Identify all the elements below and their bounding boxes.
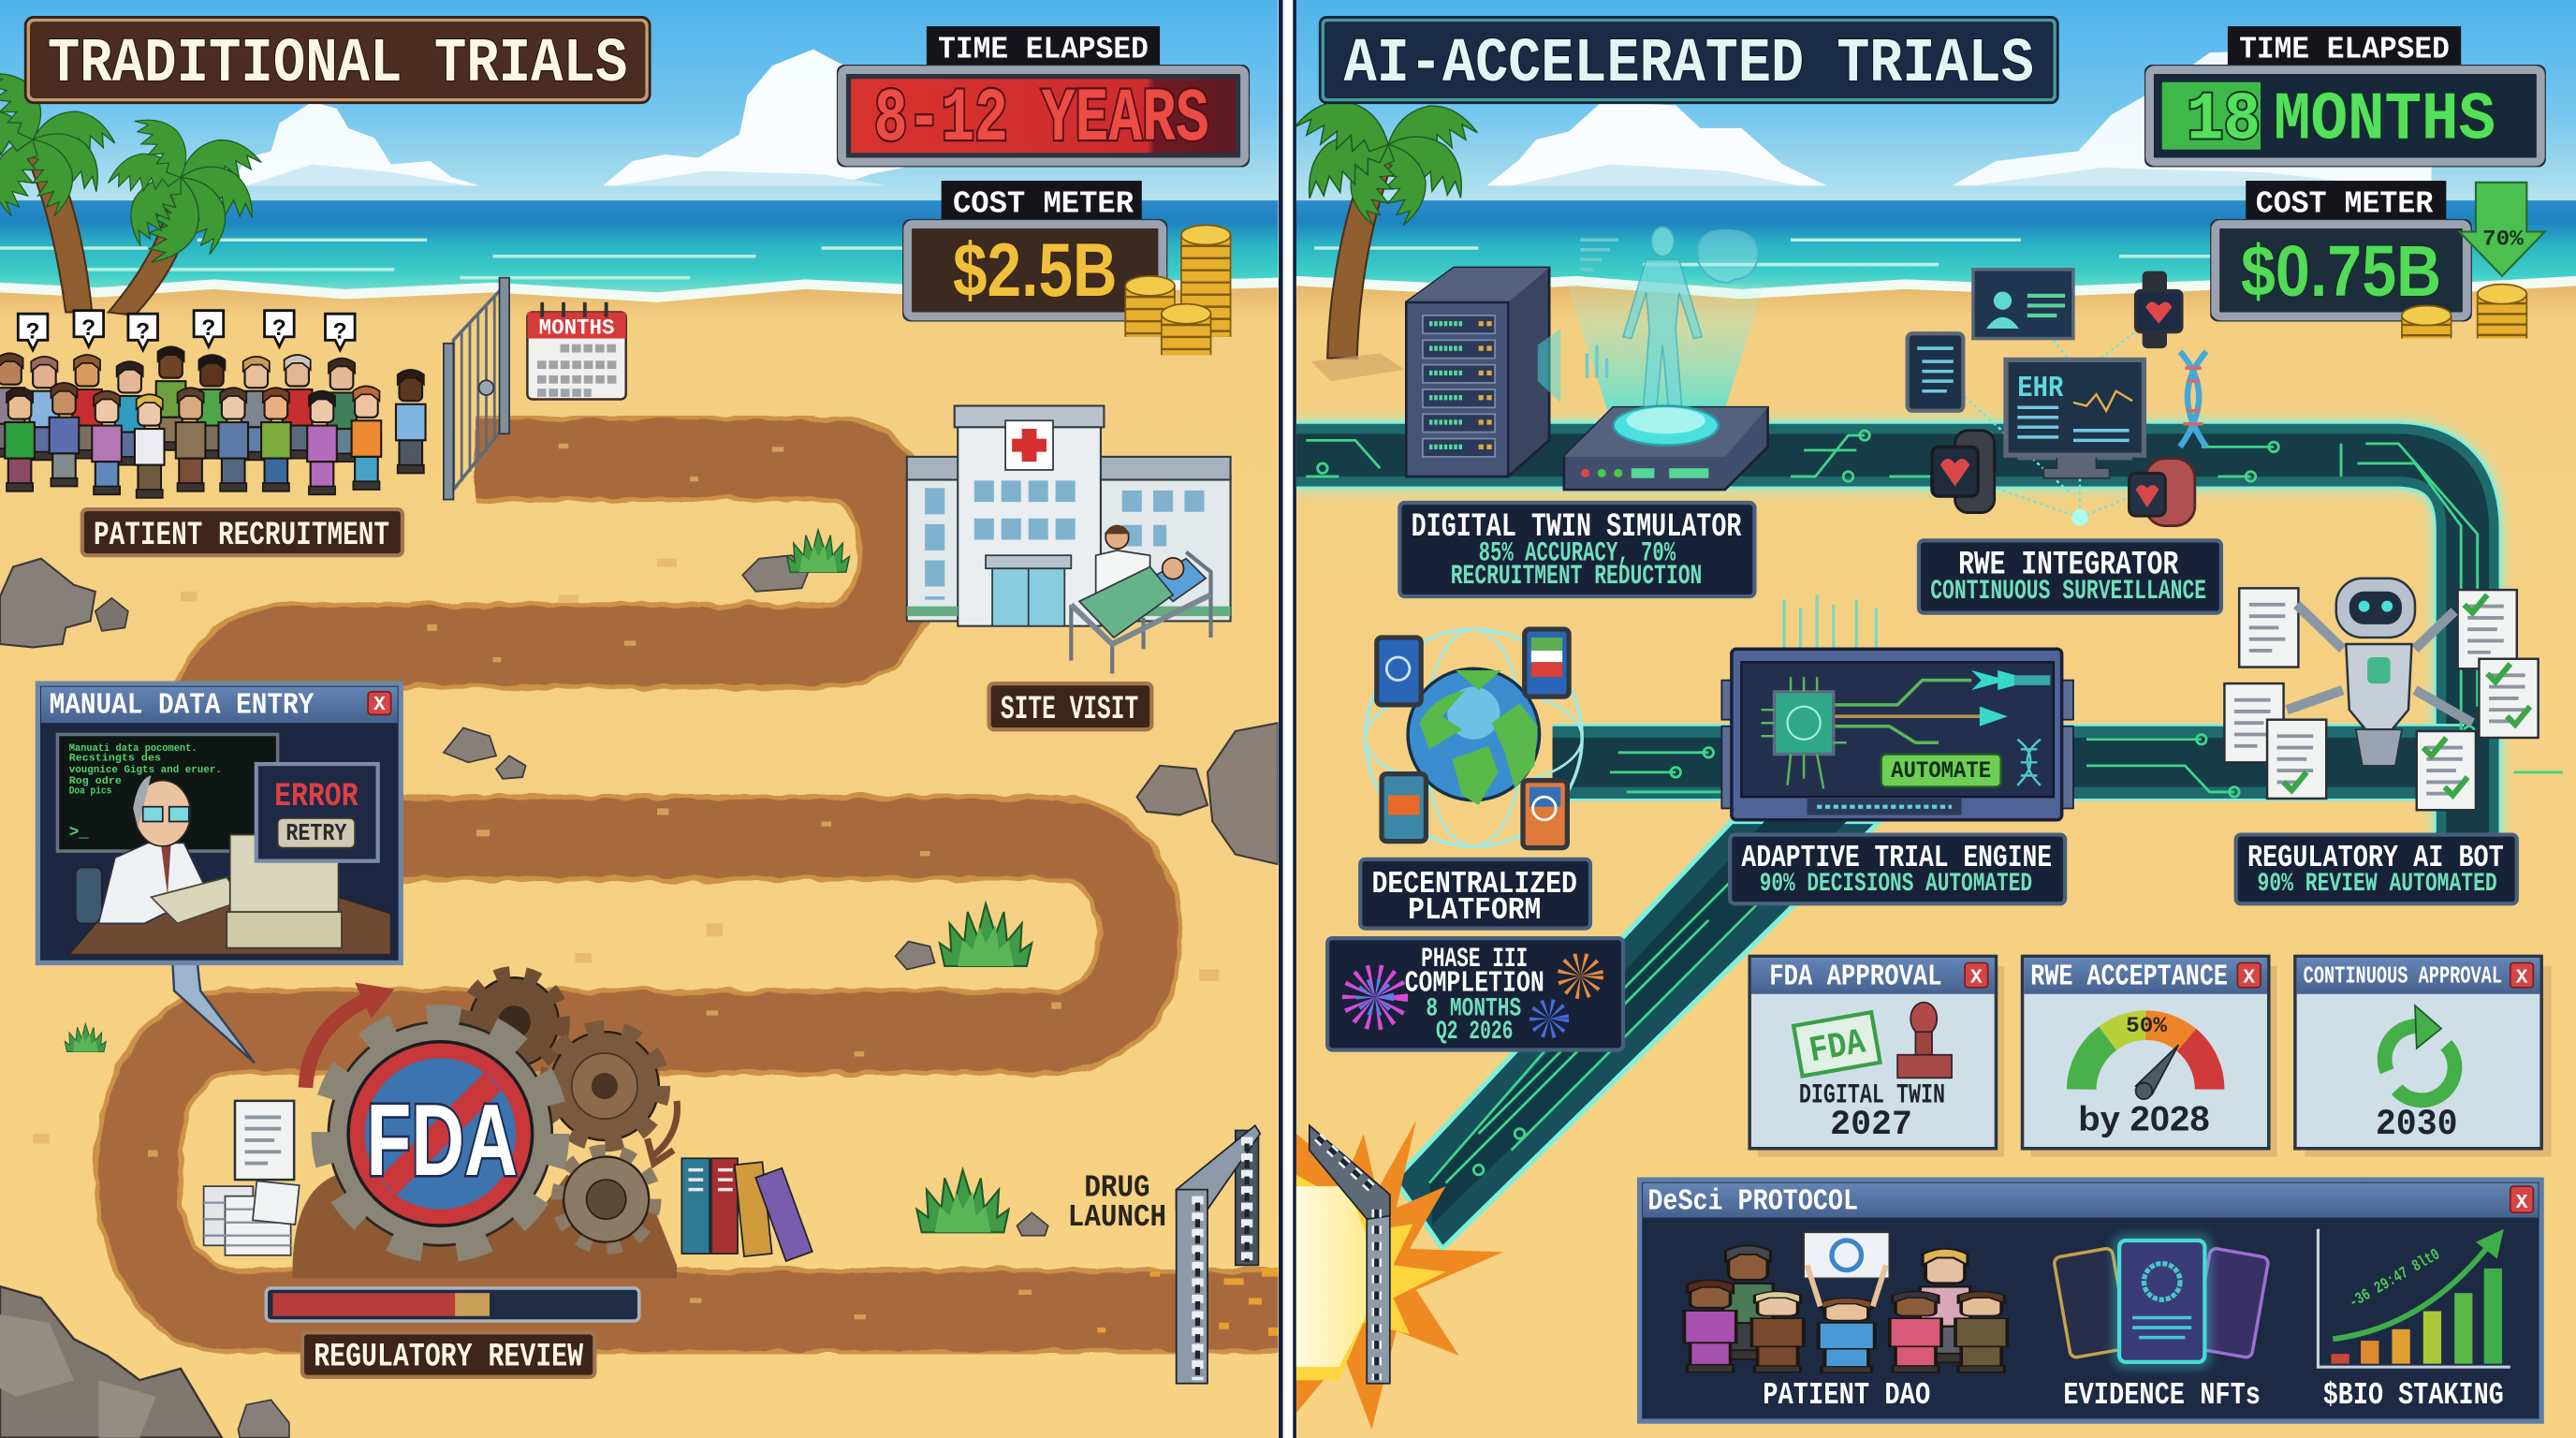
- icon: globe with connected phones: [1365, 629, 1582, 848]
- label: drug launch: DRUG: [1084, 1171, 1150, 1207]
- icon: calendar months: MONTHS: [539, 315, 614, 340]
- window: FDA approval: DIGITAL TWIN: [1799, 1079, 1945, 1111]
- label: digital twin simulator: RECRUITMENT REDUCTION: [1451, 560, 1702, 592]
- label: digital twin simulator: DIGITAL TWIN SIMULATOR: [1412, 508, 1742, 546]
- window: RWE acceptance: [2023, 956, 2277, 1157]
- winding dirt road: [138, 459, 1298, 1312]
- label: RWE integrator: RWE INTEGRATOR: [1958, 547, 2179, 584]
- icon: DNA helix: [2180, 352, 2206, 447]
- icon: renewal arrows: [2385, 1026, 2454, 1100]
- icon: server rack: [1406, 268, 1560, 477]
- label: regulatory AI bot: 90% REVIEW AUTOMATED: [2258, 870, 2497, 899]
- icon: profile window: [1973, 270, 2073, 339]
- icon: FDA stamp: [1793, 1012, 1881, 1076]
- icon: adaptive trial engine: AUTOMATE: [1891, 759, 1991, 785]
- icon: patient DAO group: [1684, 1232, 2007, 1372]
- icon: explosion breaking through gate: [1296, 1121, 1503, 1430]
- title: TRADITIONAL TRIALS: [48, 29, 627, 100]
- window: continuous approval: [2295, 956, 2552, 1157]
- title: AI-ACCELERATED TRIALS: [1344, 29, 2034, 100]
- time elapsed meter: [838, 26, 1249, 166]
- cost meter: COST METER: [953, 186, 1134, 222]
- label: site visit: [989, 683, 1151, 729]
- time elapsed meter: MONTHS: [2274, 81, 2496, 158]
- time elapsed meter: 8-12 YEARS: [874, 78, 1209, 163]
- time elapsed meter: TIME ELAPSED: [938, 32, 1149, 67]
- icon: EHR monitor: [2017, 452, 2132, 460]
- window: RWE acceptance: by 2028: [2078, 1099, 2210, 1137]
- icon: regulatory AI robot: [2224, 579, 2539, 810]
- RWE device network: EHR: [2017, 373, 2063, 405]
- panel: phase III completion: PHASE III: [1421, 943, 1528, 975]
- window: manual data entry: [37, 683, 401, 1064]
- window: RWE acceptance: 50%: [2126, 1014, 2167, 1038]
- question bubbles: ?: [26, 321, 39, 346]
- chart: BIO staking bars: [2318, 1229, 2510, 1367]
- icon: FDA stamp: FDA: [1807, 1021, 1869, 1072]
- question bubbles: ?: [272, 317, 286, 343]
- icon: small coin stacks: [2402, 285, 2526, 339]
- road sparks near finish: [1097, 1269, 1278, 1336]
- icon: tablet: [1908, 333, 1963, 411]
- window: RWE acceptance: RWE ACCEPTANCE: [2030, 961, 2228, 993]
- label: decentralized platform: DECENTRALIZED: [1372, 867, 1577, 902]
- icon: wrist band right: [2145, 459, 2195, 526]
- terminal: [57, 734, 278, 851]
- time elapsed meter: 18: [2187, 81, 2261, 158]
- window: DeSci protocol: X: [2516, 1192, 2528, 1214]
- label: patient recruitment: [82, 509, 402, 555]
- window: DeSci protocol: [1640, 1180, 2541, 1421]
- question bubbles: ?: [333, 321, 347, 346]
- beach background: [1296, 0, 2576, 1438]
- label: regulatory review: REGULATORY REVIEW: [314, 1338, 584, 1375]
- window: manual data entry: X: [373, 694, 386, 716]
- label: adaptive trial engine: ADAPTIVE TRIAL ENGINE: [1741, 841, 2052, 876]
- icon: down arrow 70%: 70%: [2482, 227, 2524, 251]
- icon: calendar months: [527, 302, 626, 399]
- window: manual data entry: Manuati data pocoment.: [69, 743, 198, 755]
- clouds: [230, 50, 920, 185]
- window: manual data entry: vougnice Gigts and eruer.: [69, 765, 222, 776]
- label: digital twin simulator: [1399, 503, 1754, 596]
- time elapsed meter: [2145, 26, 2545, 166]
- icon: gate: [444, 278, 509, 500]
- cost meter: [903, 181, 1166, 320]
- circuit pathways: [1296, 431, 2563, 1249]
- window: FDA approval: [1749, 956, 2004, 1157]
- progress bar: [266, 1288, 639, 1321]
- label: drug launch: [1071, 1175, 1164, 1226]
- window: FDA approval: X: [1970, 967, 1983, 990]
- window: continuous approval: CONTINUOUS APPROVAL: [2304, 962, 2502, 990]
- window: DeSci protocol: DeSci PROTOCOL: [1647, 1186, 1858, 1219]
- label: patient recruitment: PATIENT RECRUITMENT: [94, 517, 389, 554]
- cost meter: [2211, 181, 2471, 320]
- icon: hologram platform: [1564, 405, 1767, 490]
- cost meter: $0.75B: [2241, 231, 2441, 312]
- decorative scenery: rocks and bushes: [0, 530, 1278, 1438]
- scientist at computer: [76, 868, 102, 923]
- circuit traces: [1306, 431, 2563, 1183]
- icon: binders: [681, 1158, 812, 1261]
- label: digital twin simulator: 85% ACCURACY, 70%: [1479, 536, 1676, 568]
- cost meter: COST METER: [2256, 186, 2433, 222]
- cost meter: $2.5B: [953, 228, 1117, 313]
- window: continuous approval: 2030: [2376, 1104, 2458, 1145]
- window: RWE acceptance: X: [2243, 967, 2255, 990]
- panel: phase III completion: [1327, 938, 1623, 1049]
- palm tree: [0, 61, 116, 312]
- label: drug launch: LAUNCH: [1068, 1200, 1166, 1236]
- crowd of waiting patients: [0, 346, 426, 498]
- icon: gauge: [2082, 1025, 2210, 1090]
- label: site visit: SITE VISIT: [1001, 691, 1138, 728]
- label: adaptive trial engine: [1730, 835, 2065, 903]
- window: manual data entry: >_: [69, 823, 89, 842]
- window: DeSci protocol: PATIENT DAO: [1763, 1378, 1930, 1414]
- clouds: [1486, 50, 2432, 185]
- window: manual data entry: MANUAL DATA ENTRY: [50, 690, 314, 723]
- icon: red rotation arrow: [305, 983, 677, 1164]
- window: manual data entry: ERROR: [274, 778, 359, 815]
- icon: finish gate: [1177, 1125, 1260, 1384]
- window: DeSci protocol: $BIO STAKING: [2323, 1378, 2504, 1414]
- panel: AI-accelerated trials: [1293, 0, 2576, 1438]
- question bubbles: [18, 311, 355, 350]
- label: RWE integrator: CONTINUOUS SURVEILLANCE: [1930, 575, 2206, 607]
- label: regulatory AI bot: REGULATORY AI BOT: [2247, 841, 2504, 876]
- icon: doctor with patient in bed: [1071, 525, 1211, 674]
- label: adaptive trial engine: 90% DECISIONS AUTOMATED: [1760, 870, 2032, 899]
- palm tree 2: [108, 106, 263, 315]
- time elapsed meter: TIME ELAPSED: [2239, 32, 2450, 67]
- icon: down arrow 70%: [2459, 183, 2545, 276]
- icon: adaptive trial engine: [1721, 594, 2073, 820]
- chart: BIO staking bars: -36 29:47 8lt0: [2346, 1245, 2444, 1313]
- panel: traditional trials: [0, 0, 1298, 1438]
- RWE device network: [1908, 270, 2206, 526]
- button: automate: [1881, 755, 2001, 787]
- window: FDA approval: 2027: [1830, 1106, 1912, 1145]
- panel: phase III completion: COMPLETION: [1405, 967, 1544, 1000]
- window: DeSci protocol: EVIDENCE NFTs: [2063, 1378, 2261, 1414]
- window: FDA approval: FDA APPROVAL: [1769, 961, 1942, 993]
- icon: evidence NFT cards: [2054, 1234, 2269, 1369]
- question bubbles: ?: [81, 317, 95, 343]
- window: manual data entry: Rog odre: [69, 776, 122, 787]
- window: manual data entry: Doa pics: [69, 786, 111, 798]
- label: decentralized platform: PLATFORM: [1408, 893, 1541, 929]
- error dialog: [256, 764, 378, 861]
- window: manual data entry: RETRY: [285, 819, 346, 847]
- window: manual data entry: Recstingts des: [69, 754, 161, 765]
- road pebbles and sand marks: [33, 444, 1219, 1319]
- panel: phase III completion: 8 MONTHS: [1426, 995, 1521, 1024]
- beach background: [0, 0, 1278, 1438]
- window: continuous approval: X: [2516, 967, 2528, 990]
- question bubbles: ?: [136, 321, 150, 346]
- callout tail: [172, 961, 255, 1064]
- icon: wrist band left: [1955, 431, 1995, 513]
- icon: hospital: [907, 405, 1231, 626]
- icon: paper stacks: [204, 1101, 300, 1255]
- icon: smartwatch heart: [2143, 271, 2167, 348]
- label: decentralized platform: [1360, 859, 1590, 929]
- label: RWE integrator: [1919, 540, 2221, 613]
- icon: rusty gears with FDA seal: FDA: [366, 1083, 518, 1197]
- panel: phase III completion: Q2 2026: [1436, 1018, 1513, 1047]
- palm tree: [1293, 85, 1479, 381]
- icon: rusty gears with FDA seal: [292, 973, 677, 1278]
- icon: coin stacks: [1125, 225, 1231, 355]
- question bubbles: ?: [202, 317, 215, 343]
- icon: hologram digital twin: [1567, 227, 1764, 414]
- label: regulatory AI bot: [2236, 835, 2517, 903]
